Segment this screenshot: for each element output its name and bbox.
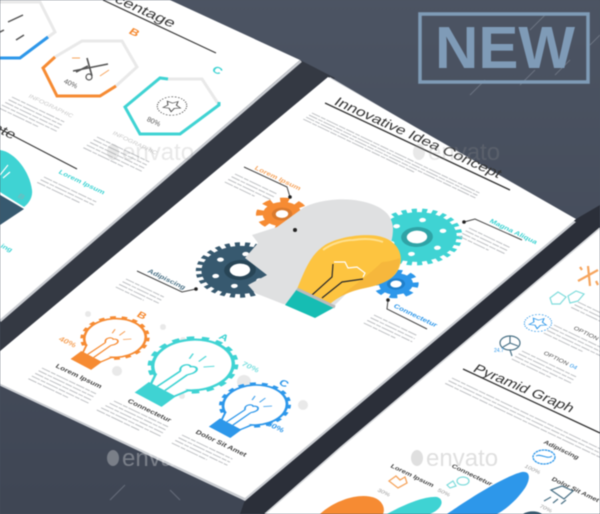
text block: infographic one: INFOGRAPHIC <box>27 94 75 119</box>
column: connectetur 50%: 50% <box>436 488 451 498</box>
letter B: B <box>126 26 142 39</box>
paragraph: pyramid intro <box>445 377 600 457</box>
hexagon C with star icon <box>125 78 219 134</box>
gear: blue <box>369 267 423 301</box>
column: connectetur 50% <box>436 464 494 498</box>
bulb B orange <box>55 309 162 377</box>
bulb A teal <box>115 327 254 416</box>
icon: blue star <box>519 311 557 335</box>
text block: lorem ipsum: Lorem Ipsum <box>54 362 104 390</box>
text block: pie label <box>0 168 107 254</box>
callout: lorem ipsum <box>225 164 303 203</box>
hexagon A <box>0 2 55 58</box>
gear: navy <box>182 234 298 306</box>
column: adipiscing 100%: Adipiscing <box>542 440 580 461</box>
gear: teal <box>358 200 476 274</box>
panel: left sheet <box>0 0 301 321</box>
callout: adipiscing: Adipiscing <box>146 267 188 291</box>
panel: right sheet <box>265 228 600 514</box>
text block: dolor sit amet: Dolor Sit Amet <box>194 428 249 458</box>
gear: orange <box>251 194 313 234</box>
letter C: C <box>209 64 226 77</box>
watermark: envato top left: envato <box>122 139 194 166</box>
heading: second section <box>0 115 77 169</box>
watermark: envato top centre: envato <box>428 139 500 166</box>
scratches on background <box>110 15 600 500</box>
callout: magna aliqua: Magna Aliqua <box>488 217 540 246</box>
title: Innovative Idea Concept <box>331 95 506 181</box>
pyramid hill orange <box>320 496 384 514</box>
watermark: envato bottom right: envato <box>426 445 498 472</box>
text block: option 04 <box>512 350 579 386</box>
text block: infographic one <box>0 94 75 134</box>
head eye <box>293 228 297 232</box>
column: lorem ipsum 30% <box>376 464 435 498</box>
watermark: envato bottom left: envato <box>122 445 194 472</box>
hexagon B with tools icon: 40% <box>63 78 78 90</box>
text block: infographic two <box>83 131 159 174</box>
text block: option 03 <box>544 301 600 360</box>
title: pyramid graph: Pyramid Graph <box>470 362 578 415</box>
value 70%: 70% <box>240 360 261 374</box>
label A: A <box>216 332 231 344</box>
pyramid hill navy <box>523 511 542 514</box>
icon: navy pie with magnifier <box>494 336 520 356</box>
text block: connectetur: Connectetur <box>126 397 173 424</box>
column: adipiscing 100% <box>523 440 580 476</box>
text block: option 04: OPTION 04 <box>542 351 579 371</box>
text block: infographic two: INFOGRAPHIC <box>111 131 159 156</box>
value 50%: 50% <box>265 420 286 434</box>
intro paragraph <box>303 112 479 200</box>
grey head silhouette <box>245 199 393 310</box>
column: connectetur 50%: Connectetur <box>450 464 494 487</box>
heading: percentage <box>86 0 216 53</box>
callout: connectetur: Connectetur <box>392 302 439 329</box>
text block: lorem ipsum <box>28 362 104 406</box>
title: pyramid graph <box>463 362 600 433</box>
pyramid hill teal <box>387 497 442 514</box>
text block: pie label: Lorem Ipsum <box>57 168 107 196</box>
icon: teal puzzle <box>550 291 584 304</box>
pie chart <box>0 150 32 225</box>
label C: C <box>276 378 291 390</box>
icon: navy pie with magnifier: 24.7 <box>494 348 504 354</box>
pie chart: B <box>16 192 27 201</box>
bulb C blue <box>193 375 303 445</box>
callout: adipiscing <box>116 267 198 306</box>
icon: orange tools <box>578 266 598 286</box>
column: dolor sit amet 70%: Dolor Sit Amet <box>550 477 600 504</box>
text block: dolor sit amet <box>172 428 249 468</box>
column: lorem ipsum 30%: Lorem Ipsum <box>389 464 435 489</box>
light bulb <box>285 235 401 318</box>
callout: connectetur <box>364 298 439 345</box>
label B: B <box>134 310 149 322</box>
decorative grey dots <box>85 311 308 410</box>
badge: NEW: NEW <box>435 15 575 81</box>
hexagon C with star icon: 80% <box>146 116 161 128</box>
column: adipiscing 100%: 100% <box>523 464 541 476</box>
shadow band between centre and right sheets <box>240 205 600 514</box>
panel: centre sheet <box>0 77 576 501</box>
callout: lorem ipsum: Lorem Ipsum <box>253 164 303 192</box>
callout: magna aliqua <box>459 217 540 257</box>
column: lorem ipsum 30%: 30% <box>376 488 391 498</box>
column: dolor sit amet 70%: 70% <box>538 504 553 514</box>
value 40%: 40% <box>57 335 78 349</box>
column: dolor sit amet 70% <box>538 477 600 514</box>
pyramid hill blue <box>447 472 529 514</box>
hexagon B with tools icon <box>43 41 137 96</box>
shadow band between left and centre sheets <box>0 60 335 356</box>
text block: connectetur <box>97 397 173 439</box>
